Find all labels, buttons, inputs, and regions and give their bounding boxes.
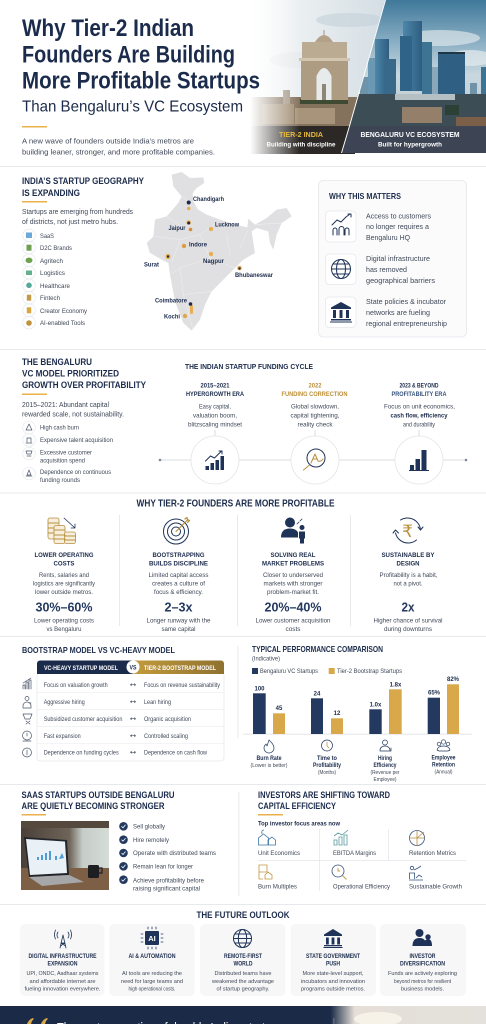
row icons — [22, 678, 32, 757]
icon: government building — [326, 297, 356, 328]
column: sustainable by design: DESIGN — [396, 560, 420, 568]
VC model risk list: High cash burn — [40, 424, 79, 432]
geography description: of districts, not just metro hubs. — [22, 219, 118, 226]
column: lower operating costs: Rents, salaries and — [39, 572, 90, 579]
text: digital infrastructure — [366, 254, 435, 285]
table rows: VC-heavy column: Fast expansion — [44, 734, 81, 740]
text: digital infrastructure: geographical barriers — [366, 276, 435, 285]
accent bar — [22, 126, 47, 128]
column: sustainable by design: Profitability is a habit, — [380, 572, 438, 579]
metric: burn rate: (Lower is better) — [250, 763, 288, 769]
card: state government push: More state-level support, — [302, 971, 364, 977]
VC model description: rewarded scale, not sustainability. — [22, 412, 124, 418]
column: solving real problems: markets with stronger — [264, 580, 322, 588]
table rows: VC-heavy column: Subsidized customer acquisition — [44, 717, 122, 723]
era 2015-2021 text: Easy capital, — [199, 404, 231, 410]
icon: coins — [48, 518, 76, 544]
card: remote-first world: weakened the advantage — [211, 979, 274, 985]
era 2022 text: reality check — [298, 422, 333, 428]
text: digital infrastructure: Digital infrastructure — [366, 254, 430, 263]
column: lower operating costs — [33, 518, 96, 633]
column: lower operating costs: vs Bengaluru — [46, 626, 82, 633]
era 2023 text: cash flow, efficiency — [390, 412, 448, 420]
focus: unit economics — [258, 830, 300, 857]
focus: EBITDA margins — [333, 830, 376, 857]
sector list: D2C Brands — [40, 245, 73, 252]
text: access to customers: Bengaluru HQ — [366, 233, 410, 242]
column: bootstrapping: focus & efficiency. — [154, 589, 203, 596]
sector list: SaaS — [40, 233, 55, 240]
bar chart: 45 — [276, 706, 283, 712]
title: Than Bengaluru’s VC Ecosystem — [22, 98, 243, 116]
panel: investors shifting — [258, 790, 466, 891]
text: access to customers: no longer requires a — [366, 222, 430, 231]
focus: operational efficiency — [332, 865, 390, 890]
panel: bootstrap vs VC-heavy table — [22, 645, 224, 761]
era 2023 text: Focus on unit economics, — [384, 404, 455, 410]
card: state government push: incubators and innovation — [301, 979, 365, 985]
checklist — [119, 822, 217, 892]
icon: tower — [54, 930, 72, 948]
heading: investors — [258, 790, 390, 811]
city labels: Chandigarh — [193, 196, 224, 203]
city labels: Kochi — [164, 314, 180, 320]
card: investor diversification: INVESTOR — [410, 953, 436, 960]
panel: funding cycle — [159, 362, 467, 484]
heading: geography — [22, 176, 145, 199]
metric: employee retention: Employee — [432, 756, 456, 762]
hero caption: Bengaluru VC ecosystem — [360, 132, 460, 148]
focus: sustainable growth: Sustainable Growth — [409, 884, 462, 890]
panel: why this matters — [318, 180, 466, 337]
intro text: building leaner, stronger, and more profitable companies. — [22, 148, 215, 156]
column: lower operating costs: LOWER OPERATING — [34, 552, 94, 559]
column: solving real problems — [256, 518, 331, 633]
bar chart: 100 — [254, 686, 265, 692]
VC model description — [22, 402, 124, 418]
era 2022 text: FUNDING CORRECTION — [282, 391, 348, 398]
panel: the future outlook — [20, 910, 466, 996]
heading: geography: INDIA’S STARTUP GEOGRAPHY — [22, 176, 145, 187]
era 2022 text: 2022 — [308, 382, 322, 390]
card: AI and automation — [110, 924, 194, 996]
card: state government push — [290, 924, 376, 996]
panel: Bengaluru VC model — [22, 357, 147, 484]
bar chart: 12 — [334, 711, 341, 717]
checklist: Operate with distributed teams — [133, 850, 217, 857]
sector list: Creator Economy — [40, 308, 88, 315]
table rows: bootstrap column — [144, 683, 220, 756]
card: digital infrastructure: DIGITAL INFRASTRUCTURE — [28, 953, 96, 960]
column: bootstrapping: 2–3x — [164, 600, 193, 614]
column: sustainable by design: not a pivot. — [394, 580, 423, 588]
column: bootstrapping — [146, 518, 211, 633]
column: bootstrapping: same capital — [162, 626, 196, 633]
icon: globe — [326, 254, 356, 284]
focus: sustainable growth — [409, 866, 462, 890]
panel: performance comparison chart — [243, 644, 472, 783]
quote band — [0, 1006, 486, 1024]
heading: performance: (Indicative) — [252, 656, 280, 662]
text: state policies: networks are fueling — [366, 308, 430, 317]
icon: rupee cycle: ₹ — [402, 522, 413, 542]
column: sustainable by design: SUSTAINABLE BY — [382, 552, 435, 559]
era 2015-2021 text: HYPERGROWTH ERA — [186, 391, 244, 398]
table rows: VC-heavy column: Focus on valuation growth — [44, 683, 108, 689]
focus: burn multiples — [258, 865, 297, 890]
heading: performance — [252, 644, 383, 662]
city labels: Lucknow — [215, 222, 240, 228]
title: Founders Are Building — [22, 42, 235, 68]
table rows: bootstrap column: Organic acquisition — [144, 717, 191, 723]
geography description — [22, 209, 133, 226]
panel: SaaS startups — [21, 790, 217, 892]
intro text: A new wave of founders outside India’s metros are — [22, 136, 194, 146]
column: sustainable by design: during downturns — [384, 626, 432, 633]
table rows: VC-heavy column: Aggressive hiring — [44, 700, 85, 706]
title: Why Tier-2 Indian — [22, 15, 194, 42]
sector list: AI-enabled Tools — [40, 320, 86, 327]
map of India — [144, 172, 292, 331]
metric: hiring efficiency: (Revenue per — [370, 770, 400, 776]
heading: bootstrap vs VC: BOOTSTRAP MODEL VS VC-HEAVY MODEL — [22, 645, 175, 655]
VC model risk list — [23, 421, 113, 484]
heading: investors: CAPITAL EFFICIENCY — [258, 801, 336, 811]
card: remote-first world: REMOTE-FIRST — [224, 953, 262, 960]
card: AI and automation: high operational costs. — [128, 987, 176, 993]
metric: burn rate: Burn Rate — [256, 756, 282, 762]
card: investor diversification: DIVERSIFICATION — [400, 960, 445, 967]
text: access to customers — [366, 212, 431, 242]
focus: EBITDA margins: EBITDA Margins — [333, 851, 376, 857]
era 2015-2021 text — [186, 382, 244, 428]
era 2022 text: Global slowdown, — [291, 404, 339, 410]
legend — [252, 668, 402, 675]
metric: hiring efficiency: Efficiency — [374, 763, 397, 769]
VC model description: 2015–2021: Abundant capital — [22, 402, 109, 409]
table rows: VC-heavy column — [44, 683, 122, 756]
checklist: Hire remotely — [133, 837, 170, 844]
text: state policies: regional entrepreneurship — [366, 319, 447, 328]
era 2015-2021 text: valuation boom, — [193, 412, 237, 420]
column: solving real problems: problem-market fit. — [267, 589, 319, 596]
city labels: Bhubaneswar — [235, 272, 273, 279]
column: solving real problems: Lower customer acquisition — [256, 618, 331, 624]
era 2023 text — [384, 382, 455, 428]
text: digital infrastructure: has removed — [366, 265, 407, 274]
heading: SaaS — [22, 790, 174, 811]
bar chart: 65% — [428, 690, 441, 696]
bar chart: 1.0x — [370, 702, 382, 708]
geography description: Startups are emerging from hundreds — [22, 209, 133, 216]
city labels: Coimbatore — [155, 298, 187, 304]
heading: VC model — [22, 357, 147, 391]
VC model risk list: Expensive talent acquisition — [40, 437, 113, 444]
VC model risk list: acquisition spend — [40, 458, 85, 464]
column: lower operating costs: lower outside metros. — [35, 589, 93, 596]
card: digital infrastructure: and affordable internet are — [30, 979, 96, 985]
icon: investors — [412, 929, 432, 946]
panel: why tier-2 founders are more profitable — [33, 498, 442, 633]
icon: AI chip: AI — [148, 934, 156, 943]
era 2023 text: 2023 & BEYOND — [400, 382, 439, 390]
column: solving real problems: Closer to underserved — [263, 572, 324, 579]
column: lower operating costs: 30%–60% — [36, 600, 92, 614]
table header: VC-HEAVY STARTUP MODEL — [44, 665, 118, 672]
column: bootstrapping: BOOTSTRAPPING — [152, 552, 204, 559]
card: state government push: STATE GOVERNMENT — [306, 953, 360, 960]
card: state government push: programs outside metros. — [301, 987, 365, 993]
table rows: VC-heavy column: Dependence on funding cycles — [44, 750, 119, 756]
city labels: Indore — [189, 242, 207, 248]
icon: government building — [324, 929, 342, 948]
card: investor diversification: beyond metros for resilient — [394, 979, 451, 985]
checklist: Achieve profitability before — [133, 877, 204, 884]
sector list — [23, 229, 88, 329]
card: investor diversification — [380, 924, 466, 996]
checklist: raising significant capital — [133, 886, 201, 892]
column: solving real problems: MARKET PROBLEMS — [262, 560, 324, 568]
column: solving real problems: SOLVING REAL — [270, 552, 316, 559]
table rows: bootstrap column: Lean hiring — [144, 700, 171, 706]
column: bootstrapping: BUILDS DISCIPLINE — [149, 560, 208, 568]
metric: employee retention — [432, 740, 456, 776]
heading: funding cycle: THE INDIAN STARTUP FUNDING CYCLE — [185, 362, 313, 371]
hero caption: Bengaluru VC ecosystem: BENGALURU VC ECOSYSTEM — [360, 132, 460, 139]
column: bootstrapping: Longer runway with the — [146, 618, 211, 624]
metric: employee retention: (Annual) — [434, 770, 453, 776]
icon: profit bars — [409, 450, 429, 470]
checklist: Remain lean for longer — [133, 864, 194, 871]
icon: customers and growth — [326, 211, 356, 242]
card: remote-first world — [200, 924, 286, 996]
card: digital infrastructure — [20, 924, 104, 996]
hero caption: Tier-2 India: Building with discipline — [266, 142, 336, 148]
focus: unit economics: Unit Economics — [258, 851, 300, 857]
focus areas subheading: Top investor focus areas now — [258, 820, 341, 828]
card: AI and automation: AI & AUTOMATION — [128, 953, 176, 960]
title — [22, 15, 260, 116]
card: AI and automation: need for large teams and — [121, 979, 183, 985]
era 2015-2021 text: 2015–2021 — [200, 382, 230, 390]
focus: operational efficiency: Operational Efficiency — [333, 884, 390, 890]
metric: time to profitability: (Months) — [318, 770, 336, 776]
heading: performance: TYPICAL PERFORMANCE COMPARISON — [252, 644, 383, 654]
legend: Tier-2 Bootstrap Startups — [337, 669, 402, 675]
heading: geography: IS EXPANDING — [22, 188, 80, 199]
heading: VC model: THE BENGALURU — [22, 357, 92, 368]
heading: future outlook: THE FUTURE OUTLOOK — [196, 910, 290, 921]
focus: retention metrics — [409, 830, 456, 857]
text: state policies: State policies & incubator — [366, 297, 446, 306]
metric: burn rate — [250, 740, 288, 769]
heading: VC model: GROWTH OVER PROFITABILITY — [22, 380, 147, 391]
metric: hiring efficiency: Hiring — [378, 756, 392, 762]
column: sustainable by design — [374, 518, 442, 633]
icon: magnifier — [304, 449, 325, 470]
city labels: Jaipur — [168, 225, 186, 232]
focus: burn multiples: Burn Multiples — [258, 884, 297, 890]
card: digital infrastructure: UPI, ONDC, Aadhaar systems — [26, 971, 99, 977]
metric: hiring efficiency: Employee) — [374, 777, 397, 783]
heading: SaaS: SAAS STARTUPS OUTSIDE BENGALURU — [22, 790, 174, 800]
table rows: bootstrap column: Dependence on cash flow — [144, 750, 208, 756]
checklist: Sell globally — [133, 824, 166, 831]
table body — [37, 672, 224, 761]
heading: SaaS: ARE QUIETLY BECOMING STRONGER — [22, 801, 165, 811]
card: digital infrastructure: fueling innovation everywhere. — [24, 987, 101, 993]
heading: investors: INVESTORS ARE SHIFTING TOWARD — [258, 790, 390, 800]
column: lower operating costs: Lower operating costs — [34, 618, 94, 624]
icon: rising bars — [206, 451, 224, 470]
icon: target — [164, 518, 190, 544]
bar chart: 82% — [447, 677, 460, 683]
sector list: Fintech — [40, 295, 60, 302]
card: remote-first world: WORLD — [234, 960, 253, 967]
VC model risk list: Excessive customer — [40, 450, 93, 456]
era 2023 text: PROFITABILITY ERA — [392, 391, 447, 398]
hero caption: Tier-2 India — [266, 132, 336, 148]
metric: time to profitability: Profitability — [313, 763, 342, 769]
text: state policies — [366, 297, 447, 328]
table row arrows — [130, 684, 136, 753]
VC model risk list: funding rounds — [40, 477, 81, 484]
era 2015-2021 text: blitzscaling mindset — [188, 422, 242, 428]
city labels: Nagpur — [203, 258, 224, 265]
icon: globe — [234, 930, 252, 948]
card: remote-first world: of startup geography. — [216, 987, 270, 993]
era 2022 text: capital tightening, — [290, 412, 340, 420]
photo: laptop with dashboard — [21, 821, 109, 890]
column: bootstrapping: Limited capital access — [148, 572, 208, 579]
heading: more profitable: WHY TIER-2 FOUNDERS ARE MORE PROFITABLE — [136, 498, 335, 510]
column: sustainable by design: Higher chance of survival — [374, 618, 442, 624]
column: sustainable by design: 2x — [402, 600, 415, 614]
title: More Profitable Startups — [22, 68, 260, 94]
column: solving real problems: 20%–40% — [264, 600, 322, 614]
column: solving real problems: costs — [286, 626, 300, 633]
bar chart: 24 — [314, 691, 321, 697]
table rows: bootstrap column: Controlled scaling — [144, 734, 188, 740]
city labels: Surat — [144, 262, 160, 268]
VC model risk list: Dependence on continuous — [40, 469, 112, 476]
card: investor diversification: Funds are actively exploring — [388, 971, 457, 977]
column: bootstrapping: creates a culture of — [152, 580, 205, 588]
metric: time to profitability: Time to — [317, 756, 337, 762]
heading: why this matters: WHY THIS MATTERS — [329, 191, 401, 201]
legend: Bengaluru VC Startups — [260, 669, 318, 675]
era 2022 text — [282, 382, 348, 428]
column: lower operating costs: COSTS — [54, 560, 75, 568]
timeline — [159, 430, 467, 484]
card: digital infrastructure: EXPANSION — [48, 960, 78, 967]
hero image: India Gate vs Bengaluru skyline — [240, 0, 486, 154]
heading: VC model: VC MODEL PRIORITIZED — [22, 368, 119, 380]
table header: TIER-2 BOOTSTRAP MODEL — [144, 665, 216, 672]
city labels — [144, 196, 273, 320]
card: AI and automation: AI tools are reducing the — [122, 971, 182, 977]
card: remote-first world: Distributed teams have — [214, 971, 272, 977]
intro text — [22, 136, 215, 156]
bar chart: 1.8x — [390, 682, 402, 688]
table header: VS — [130, 665, 136, 671]
sector list: Agritech — [40, 258, 63, 265]
city markers — [165, 200, 242, 318]
table header — [37, 660, 224, 674]
panel: startup geography — [22, 172, 292, 331]
sector list: Healthcare — [40, 283, 70, 290]
card: state government push: PUSH — [326, 960, 340, 967]
sector list: Logistics — [40, 270, 66, 277]
metric: hiring efficiency — [370, 740, 400, 783]
focus: retention metrics: Retention Metrics — [409, 851, 456, 857]
metric: time to profitability — [313, 740, 342, 776]
text: access to customers: Access to customers — [366, 212, 431, 220]
icon: quotation mark — [27, 1018, 48, 1024]
hero caption: Bengaluru VC ecosystem: Built for hypergrowth — [378, 142, 442, 148]
hero caption: Tier-2 India: TIER-2 INDIA — [279, 132, 323, 139]
card: investor diversification: business models. — [401, 987, 444, 993]
metric: employee retention: Retention — [432, 762, 455, 768]
bar chart — [243, 677, 472, 735]
table rows: bootstrap column: Focus on revenue sustainability — [144, 683, 220, 689]
column: lower operating costs: logistics are significantly — [33, 580, 96, 588]
icon: founder and person — [281, 518, 305, 544]
era 2023 text: and durability — [403, 422, 436, 428]
